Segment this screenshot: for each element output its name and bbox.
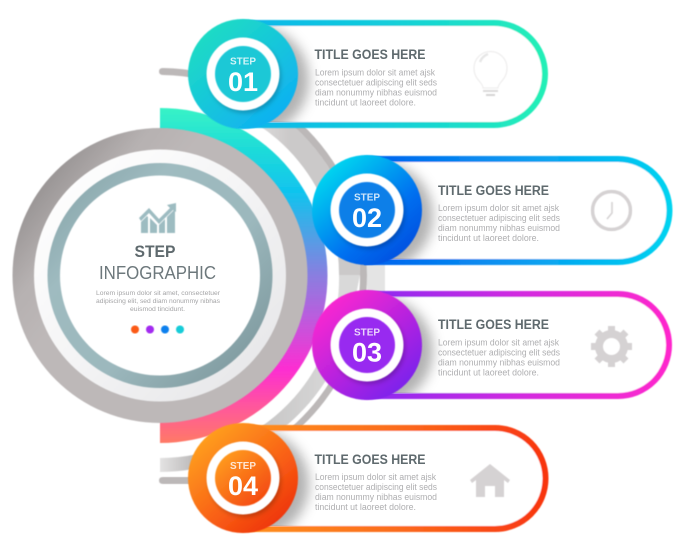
panel: step 01: [188, 19, 545, 134]
white inner ring: [34, 150, 286, 402]
badge white ring 02: [330, 174, 404, 246]
heading: INFOGRAPHIC: INFOGRAPHIC: [99, 262, 216, 283]
body text 04: [315, 472, 437, 512]
circle shadow 03: [393, 297, 440, 393]
circle shadow 02: [391, 162, 440, 259]
pill outline 04: [243, 428, 546, 529]
title 04: TITLE GOES HERE: [314, 452, 426, 467]
white centre disc: [60, 176, 260, 376]
badge inner 04: [215, 450, 271, 506]
title 03: TITLE GOES HERE: [438, 317, 549, 332]
badge circle 02: [312, 155, 422, 265]
icon: rising chart: [139, 203, 176, 233]
icon: gear: [591, 326, 632, 367]
body text 04: tincidunt ut laoreet dolore.: [315, 502, 416, 512]
title 01: TITLE GOES HERE: [314, 47, 426, 62]
badge inner 02: [339, 182, 395, 238]
panel: step 03: [312, 290, 669, 405]
central body text: euismod tincidunt.: [130, 306, 185, 313]
icon: light bulb: [474, 52, 507, 95]
badge circle 04: [188, 423, 298, 533]
panel: step 02: [312, 155, 669, 270]
body text 04: diam nonummy nibhas euismod: [315, 492, 437, 502]
body text 01: [315, 68, 437, 108]
step label 01: STEP: [230, 56, 256, 68]
step number 04: 04: [228, 471, 258, 501]
teal ring: [48, 163, 272, 388]
body text 01: tincidunt ut laoreet dolore.: [315, 98, 416, 108]
body text 02: tincidunt ut laoreet dolore.: [438, 233, 539, 243]
body text 03: Lorem ipsum dolor sit amet ajsk: [438, 338, 559, 348]
icon: house: [470, 464, 510, 497]
badge white ring 01: [206, 38, 280, 110]
circle shadow 04: [269, 431, 316, 526]
body text 04: consectetuer adipiscing elit seds: [315, 482, 437, 492]
body text 02: Lorem ipsum dolor sit amet ajsk: [438, 203, 559, 213]
badge white ring 04: [206, 442, 280, 514]
body text 03: consectetuer adipiscing elit seds: [438, 348, 560, 358]
badge circle 03: [312, 290, 422, 400]
coloured gradient half ring: [160, 108, 328, 443]
step label 04: STEP: [230, 461, 256, 472]
badge white ring 03: [330, 308, 404, 382]
badge circle 01: [188, 19, 298, 129]
body text 03: diam nonummy nibhas euismod: [438, 358, 560, 368]
pill outline 01: [243, 23, 545, 125]
step label 02: STEP: [354, 192, 380, 204]
body text 02: diam nonummy nibhas euismod: [438, 223, 560, 233]
heading: STEP: STEP: [134, 242, 176, 261]
central body text: [96, 290, 221, 313]
icon: clock: [592, 192, 630, 230]
central body text: Lorem ipsum dolor sit amet, consectetuer: [96, 290, 221, 297]
pill outline 02: [367, 159, 669, 262]
background grey arcs: [159, 68, 385, 475]
body text 02: [438, 203, 560, 243]
body text 01: consectetuer adipiscing elit seds: [315, 78, 437, 88]
body text 03: tincidunt ut laoreet dolore.: [438, 368, 539, 378]
badge inner 01: [215, 46, 271, 102]
outer grey ring: [12, 128, 308, 423]
pill outline 03: [367, 294, 669, 396]
badge inner 03: [339, 317, 395, 373]
step number 02: 02: [352, 203, 382, 233]
body text 04: Lorem ipsum dolor sit amet ajsk: [315, 472, 436, 482]
step number 03: 03: [352, 338, 382, 368]
panel: step 04: [159, 423, 546, 538]
central body text: adipiscing elit, sed diam nonummy nibhas: [96, 298, 220, 305]
title 02: TITLE GOES HERE: [438, 183, 549, 198]
left grey stub behind badge: [159, 477, 195, 484]
central circle: [12, 128, 308, 423]
body text 03: [438, 338, 560, 378]
body text 01: diam nonummy nibhas euismod: [315, 88, 437, 98]
step number 01: 01: [228, 67, 258, 97]
body text 02: consectetuer adipiscing elit seds: [438, 213, 560, 223]
four colour dots: [131, 326, 184, 334]
body text 01: Lorem ipsum dolor sit amet ajsk: [315, 68, 435, 78]
step label 03: STEP: [354, 328, 380, 338]
circle shadow 01: [269, 26, 316, 122]
